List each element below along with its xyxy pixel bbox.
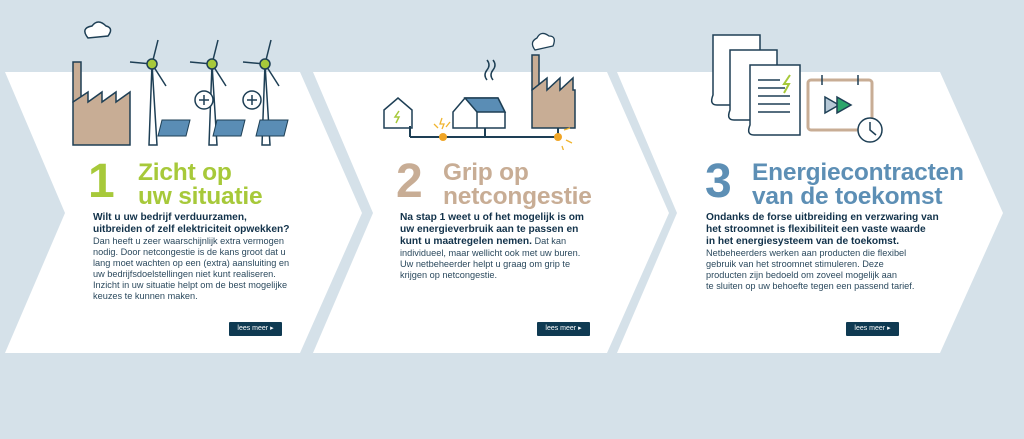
text 1 bbox=[93, 212, 289, 301]
button 2: lees meer ▸ bbox=[545, 325, 582, 332]
title 2: netcongestie bbox=[443, 183, 592, 210]
title 2 bbox=[443, 159, 592, 210]
text 3: Ondanks de forse uitbreiding en verzwaring van bbox=[706, 212, 939, 223]
text 2: Uw netbeheerder helpt u graag om grip te bbox=[400, 259, 570, 269]
text 2 bbox=[400, 212, 584, 280]
title 1: Zicht op bbox=[138, 159, 232, 186]
text 2: Na stap 1 weet u of het mogelijk is om bbox=[400, 212, 584, 223]
text 1: Dan heeft u zeer waarschijnlijk extra vermogen bbox=[93, 236, 284, 246]
title 3 bbox=[752, 159, 964, 210]
text 1: Wilt u uw bedrijf verduurzamen, bbox=[93, 212, 247, 223]
text 2: kunt u maatregelen nemen. Dat kan bbox=[400, 236, 566, 247]
button 1 bbox=[229, 322, 282, 336]
text 1: Inzicht in uw situatie helpt om de best mogelijke bbox=[93, 280, 287, 290]
title 3: van de toekomst bbox=[752, 183, 942, 210]
title 1 bbox=[138, 159, 262, 210]
text 3: het stroomnet is flexibiliteit een vaste waarde bbox=[706, 224, 926, 235]
text 1: keuzes te kunnen maken. bbox=[93, 291, 198, 301]
text 1: uw bedrijfsdoelstellingen niet kunt realiseren. bbox=[93, 269, 276, 279]
text 2: krijgen op netcongestie. bbox=[400, 270, 497, 280]
text 3: gebruik van het stroomnet stimuleren. Deze bbox=[706, 259, 884, 269]
icon: grid with houses and factory bbox=[383, 32, 576, 150]
title 1: uw situatie bbox=[138, 183, 262, 210]
text 3: te sluiten op uw behoefte tegen een passend tarief. bbox=[706, 281, 914, 291]
text 3 bbox=[706, 212, 939, 291]
number 3: 3 bbox=[705, 155, 732, 208]
button 2 bbox=[537, 322, 590, 336]
text 2: individueel, maar wellicht ook met uw buren. bbox=[400, 248, 580, 258]
button 3: lees meer ▸ bbox=[854, 325, 891, 332]
number 1: 1 bbox=[88, 155, 115, 208]
icon: contracts, calendar, clock bbox=[710, 34, 883, 143]
text 1: uitbreiden of zelf elektriciteit opwekken? bbox=[93, 224, 289, 235]
text 1: lang moet wachten op een (extra) aansluiting en bbox=[93, 258, 289, 268]
title 2: Grip op bbox=[443, 159, 529, 186]
text 2: uw energieverbruik aan te passen en bbox=[400, 224, 578, 235]
text 3: in het energiesysteem van de toekomst. bbox=[706, 236, 899, 247]
icon: factory and wind turbines bbox=[72, 21, 289, 146]
title 3: Energiecontracten bbox=[752, 159, 964, 186]
button 1: lees meer ▸ bbox=[237, 325, 274, 332]
number 2: 2 bbox=[396, 155, 423, 208]
text 1: nodig. Door netcongestie is de kans groot dat u bbox=[93, 247, 286, 257]
text 3: producten zijn bedoeld om zoveel mogelijk aan bbox=[706, 270, 897, 280]
button 3 bbox=[846, 322, 899, 336]
text 3: Netbeheerders werken aan producten die flexibel bbox=[706, 248, 906, 258]
